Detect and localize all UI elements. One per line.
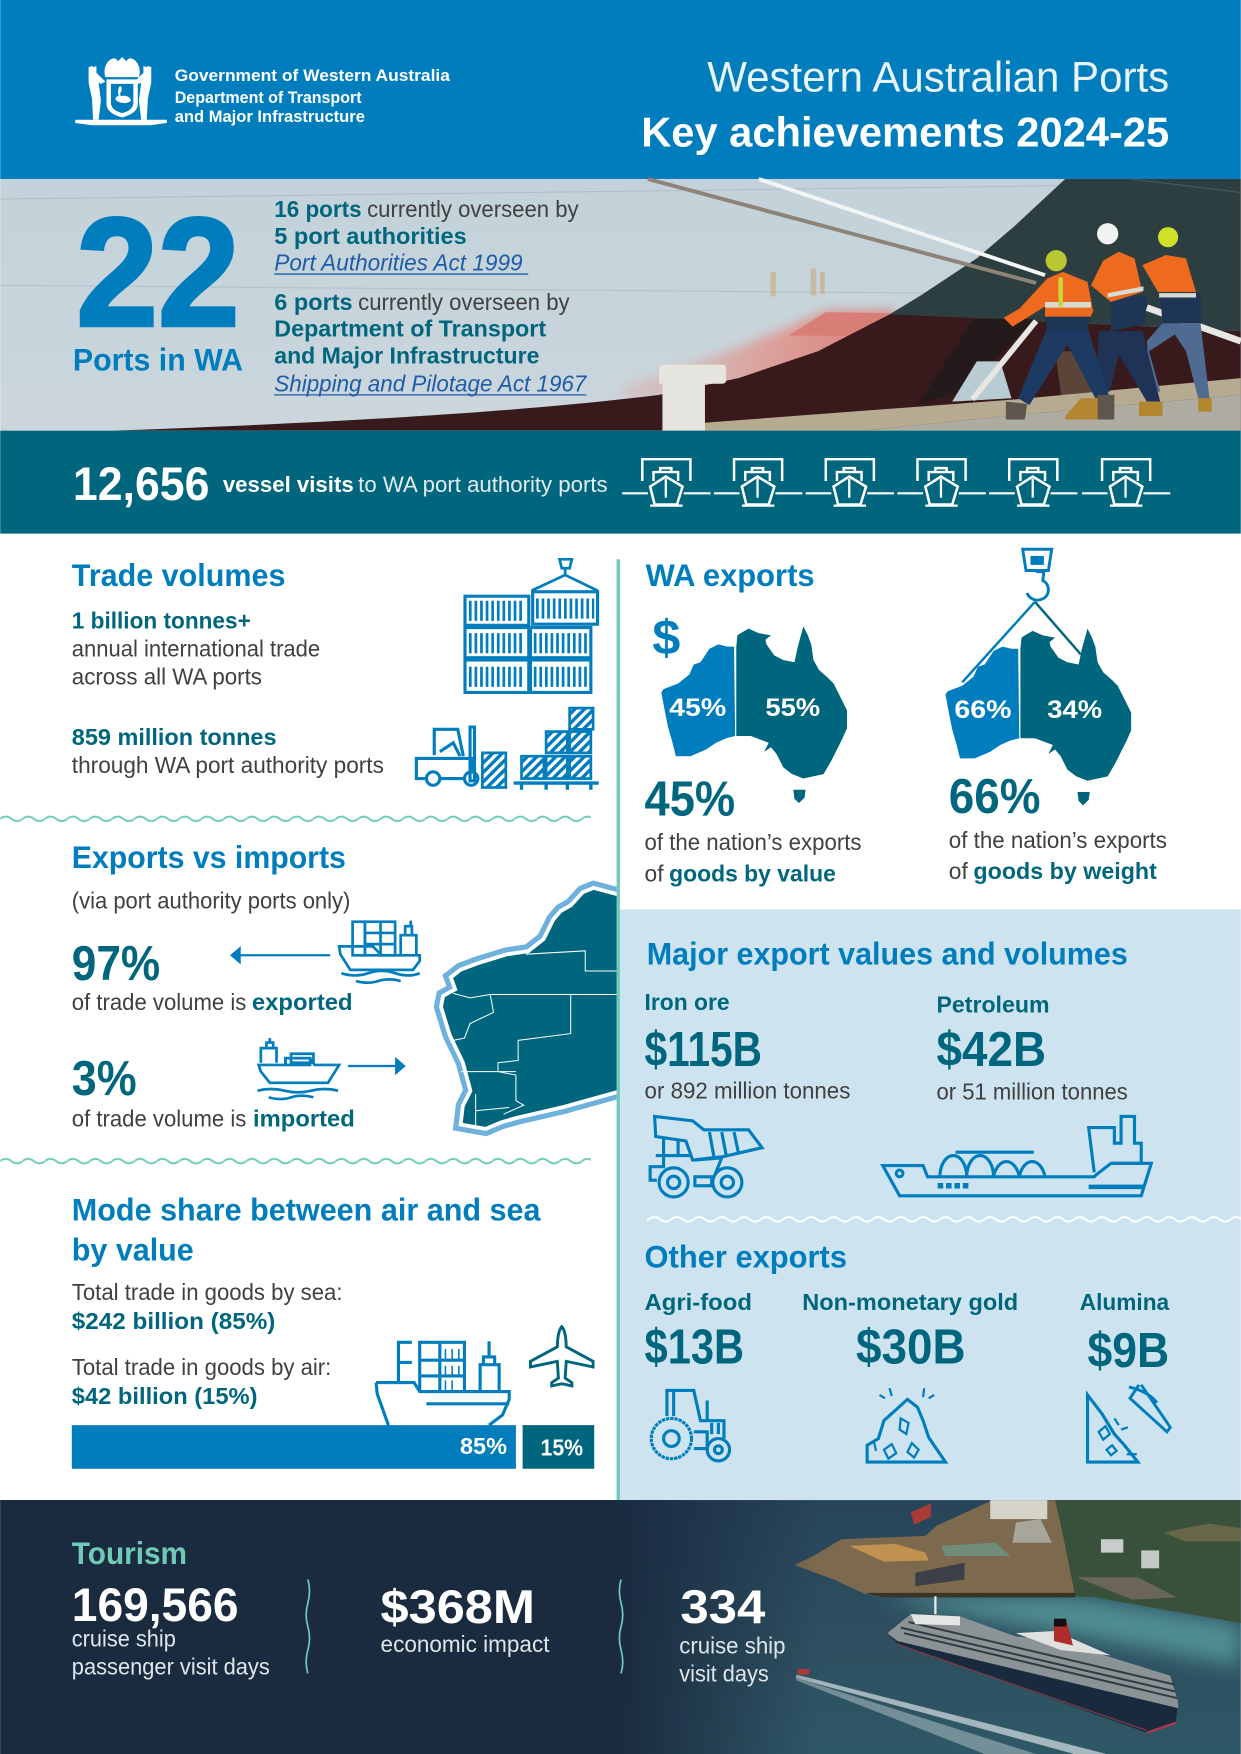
panel: mode share: by value bbox=[72, 1233, 194, 1268]
panel: other exports: $9B bbox=[1088, 1323, 1169, 1378]
stat: 45% by value: of bbox=[645, 860, 664, 886]
icon: haul truck bbox=[650, 1116, 762, 1197]
map: Australia by weight: 66% bbox=[954, 697, 1012, 724]
map: Australia by weight bbox=[945, 629, 1131, 805]
photo: port and cruise ship bbox=[0, 1500, 1241, 1754]
panel: tourism: 169,566 bbox=[72, 1578, 238, 1631]
panel: WA exports: $ bbox=[652, 610, 680, 665]
title: Key achievements 2024-25 bbox=[641, 110, 1169, 156]
icon: LNG tanker bbox=[883, 1116, 1151, 1196]
wave divider bbox=[0, 814, 591, 823]
header band bbox=[0, 0, 1241, 179]
logo: Government of Western Australia crest: Government of Western Australia bbox=[175, 66, 451, 85]
panel: other exports: Other exports bbox=[645, 1239, 847, 1274]
port oversight text: Department of Transport bbox=[274, 316, 546, 342]
panel: WA exports bbox=[646, 558, 815, 665]
big number: 22 ports in WA: Ports in WA bbox=[73, 342, 243, 377]
panel: exports vs imports: 97% bbox=[72, 936, 160, 991]
panel: tourism: $368M bbox=[381, 1580, 535, 1633]
panel: major export values: Major export values and volumes bbox=[647, 936, 1128, 971]
icon: stacked containers bbox=[465, 559, 598, 692]
panel: mode share bbox=[72, 1192, 541, 1409]
stat: 66% by weight bbox=[949, 769, 1167, 884]
stat: 66% by weight: of the nation’s exports bbox=[949, 827, 1167, 853]
port oversight text: Shipping and Pilotage Act 1967 bbox=[274, 371, 587, 397]
column divider bbox=[617, 559, 620, 1500]
panel: mode share: $42 billion (15%) bbox=[72, 1383, 258, 1409]
panel: tourism: cruise ship bbox=[72, 1626, 176, 1652]
icon: export ship bbox=[339, 921, 420, 983]
stat: 66% by weight: 66% bbox=[949, 769, 1041, 824]
icon: pickaxe on rock bbox=[1088, 1385, 1170, 1462]
panel: exports vs imports: (via port authority ports only) bbox=[72, 887, 350, 913]
port oversight text bbox=[274, 196, 587, 397]
logo: Government of Western Australia crest: and Major Infrastructure bbox=[175, 107, 365, 126]
panel: exports vs imports: exported bbox=[252, 989, 353, 1015]
panel: mode share: $242 billion (85%) bbox=[72, 1308, 275, 1334]
icon: container ship bbox=[376, 1341, 509, 1425]
panel: exports vs imports: of trade volume is bbox=[72, 989, 246, 1015]
port oversight text: currently overseen by bbox=[358, 289, 570, 315]
panel: major export values: or 51 million tonnes bbox=[937, 1079, 1128, 1105]
vessel visits band bbox=[0, 431, 1241, 534]
panel: other exports: Alumina bbox=[1080, 1289, 1170, 1315]
icon: forklift and pallet bbox=[416, 708, 599, 790]
bar chart: mode share: 85% bbox=[460, 1433, 507, 1459]
panel: other exports: $13B bbox=[645, 1320, 744, 1375]
panel: other exports bbox=[645, 1239, 1170, 1378]
wave divider bbox=[647, 1215, 1241, 1224]
panel: tourism: Tourism bbox=[72, 1536, 187, 1571]
stat: 45% by value: of the nation’s exports bbox=[645, 829, 862, 855]
panel: tourism: passenger visit days bbox=[72, 1654, 270, 1680]
bar chart: mode share bbox=[72, 1425, 594, 1469]
panel: trade volumes: annual international trade bbox=[72, 636, 320, 662]
stat: 66% by weight: of bbox=[949, 858, 968, 884]
vessel visits band: to WA port authority ports bbox=[358, 472, 608, 497]
panel: tourism: cruise ship bbox=[679, 1632, 785, 1658]
bar chart: mode share: 15% bbox=[541, 1434, 583, 1460]
title bbox=[641, 55, 1169, 156]
map: Western Australia bbox=[441, 888, 622, 1129]
panel: exports vs imports: of trade volume is bbox=[72, 1105, 246, 1131]
panel: trade volumes: 859 million tonnes bbox=[72, 724, 277, 750]
panel: mode share: Total trade in goods by sea: bbox=[72, 1279, 343, 1305]
panel: mode share: Total trade in goods by air: bbox=[72, 1354, 331, 1380]
panel: tourism: economic impact bbox=[381, 1631, 550, 1657]
map: Australia by value: 45% bbox=[669, 695, 726, 722]
port oversight text: 5 port authorities bbox=[274, 223, 467, 249]
icon: plane bbox=[530, 1327, 593, 1386]
port oversight text: Port Authorities Act 1999 bbox=[274, 250, 523, 276]
map: Australia by weight: 34% bbox=[1047, 697, 1102, 724]
vessel visits band: 12,656 bbox=[73, 457, 209, 510]
icons: six vessels bbox=[622, 459, 1170, 506]
panel: other exports: $30B bbox=[856, 1320, 966, 1375]
map: Australia by value bbox=[661, 626, 847, 803]
panel: tourism: 334 bbox=[680, 1580, 765, 1633]
port oversight text: and Major Infrastructure bbox=[274, 343, 539, 369]
icon: gold rock bbox=[867, 1388, 945, 1462]
panel: trade volumes: through WA port authority ports bbox=[72, 752, 384, 778]
title: Western Australian Ports bbox=[707, 55, 1169, 102]
icon: crane hook bbox=[962, 549, 1081, 682]
vessel visits band: vessel visits bbox=[223, 472, 354, 497]
panel: trade volumes: Trade volumes bbox=[72, 558, 285, 593]
panel: major export values: Petroleum bbox=[937, 991, 1049, 1017]
port oversight text: 16 ports bbox=[274, 196, 362, 222]
panel: exports vs imports: imported bbox=[253, 1105, 355, 1131]
stat: 45% by value: goods by value bbox=[669, 860, 836, 886]
panel: exports vs imports bbox=[72, 840, 355, 1131]
panel: WA exports: WA exports bbox=[646, 558, 815, 593]
panel: major export values: or 892 million tonnes bbox=[645, 1077, 850, 1103]
stat: 45% by value: 45% bbox=[645, 771, 735, 826]
panel: exports vs imports: Exports vs imports bbox=[72, 840, 346, 875]
panel: tourism bbox=[72, 1536, 785, 1686]
stat: 66% by weight: goods by weight bbox=[973, 858, 1157, 884]
panel: major export values: $115B bbox=[645, 1022, 762, 1077]
photo: ship hull and workers bbox=[0, 179, 1241, 431]
big number: 22 ports in WA: 22 bbox=[76, 186, 240, 359]
stat: 45% by value bbox=[645, 771, 862, 886]
logo: Government of Western Australia crest: Department of Transport bbox=[175, 88, 362, 107]
icon: tractor bbox=[651, 1390, 730, 1461]
logo: Government of Western Australia crest bbox=[75, 57, 451, 126]
panel: trade volumes bbox=[72, 558, 384, 778]
arrow: import bbox=[348, 1059, 404, 1073]
map: Australia by value: 55% bbox=[765, 695, 820, 722]
panel: tourism: visit days bbox=[679, 1660, 769, 1686]
panel: major export values: $42B bbox=[937, 1022, 1046, 1077]
panel: major export values bbox=[645, 936, 1128, 1105]
panel: mode share: Mode share between air and sea bbox=[72, 1192, 541, 1227]
panel: other exports: Non-monetary gold bbox=[802, 1289, 1018, 1315]
panel: trade volumes: 1 billion tonnes+ bbox=[72, 608, 251, 634]
port oversight text: 6 ports bbox=[274, 289, 353, 315]
panel: other exports: Agri-food bbox=[645, 1289, 752, 1315]
port oversight text: currently overseen by bbox=[367, 196, 579, 222]
panel: exports vs imports: 3% bbox=[72, 1051, 137, 1106]
panel: major export background bbox=[620, 909, 1241, 1500]
panel: trade volumes: across all WA ports bbox=[72, 664, 262, 690]
panel: major export values: Iron ore bbox=[645, 989, 730, 1015]
wave divider bbox=[0, 1157, 591, 1166]
icon: import ship bbox=[258, 1038, 339, 1099]
arrow: export bbox=[232, 949, 330, 962]
